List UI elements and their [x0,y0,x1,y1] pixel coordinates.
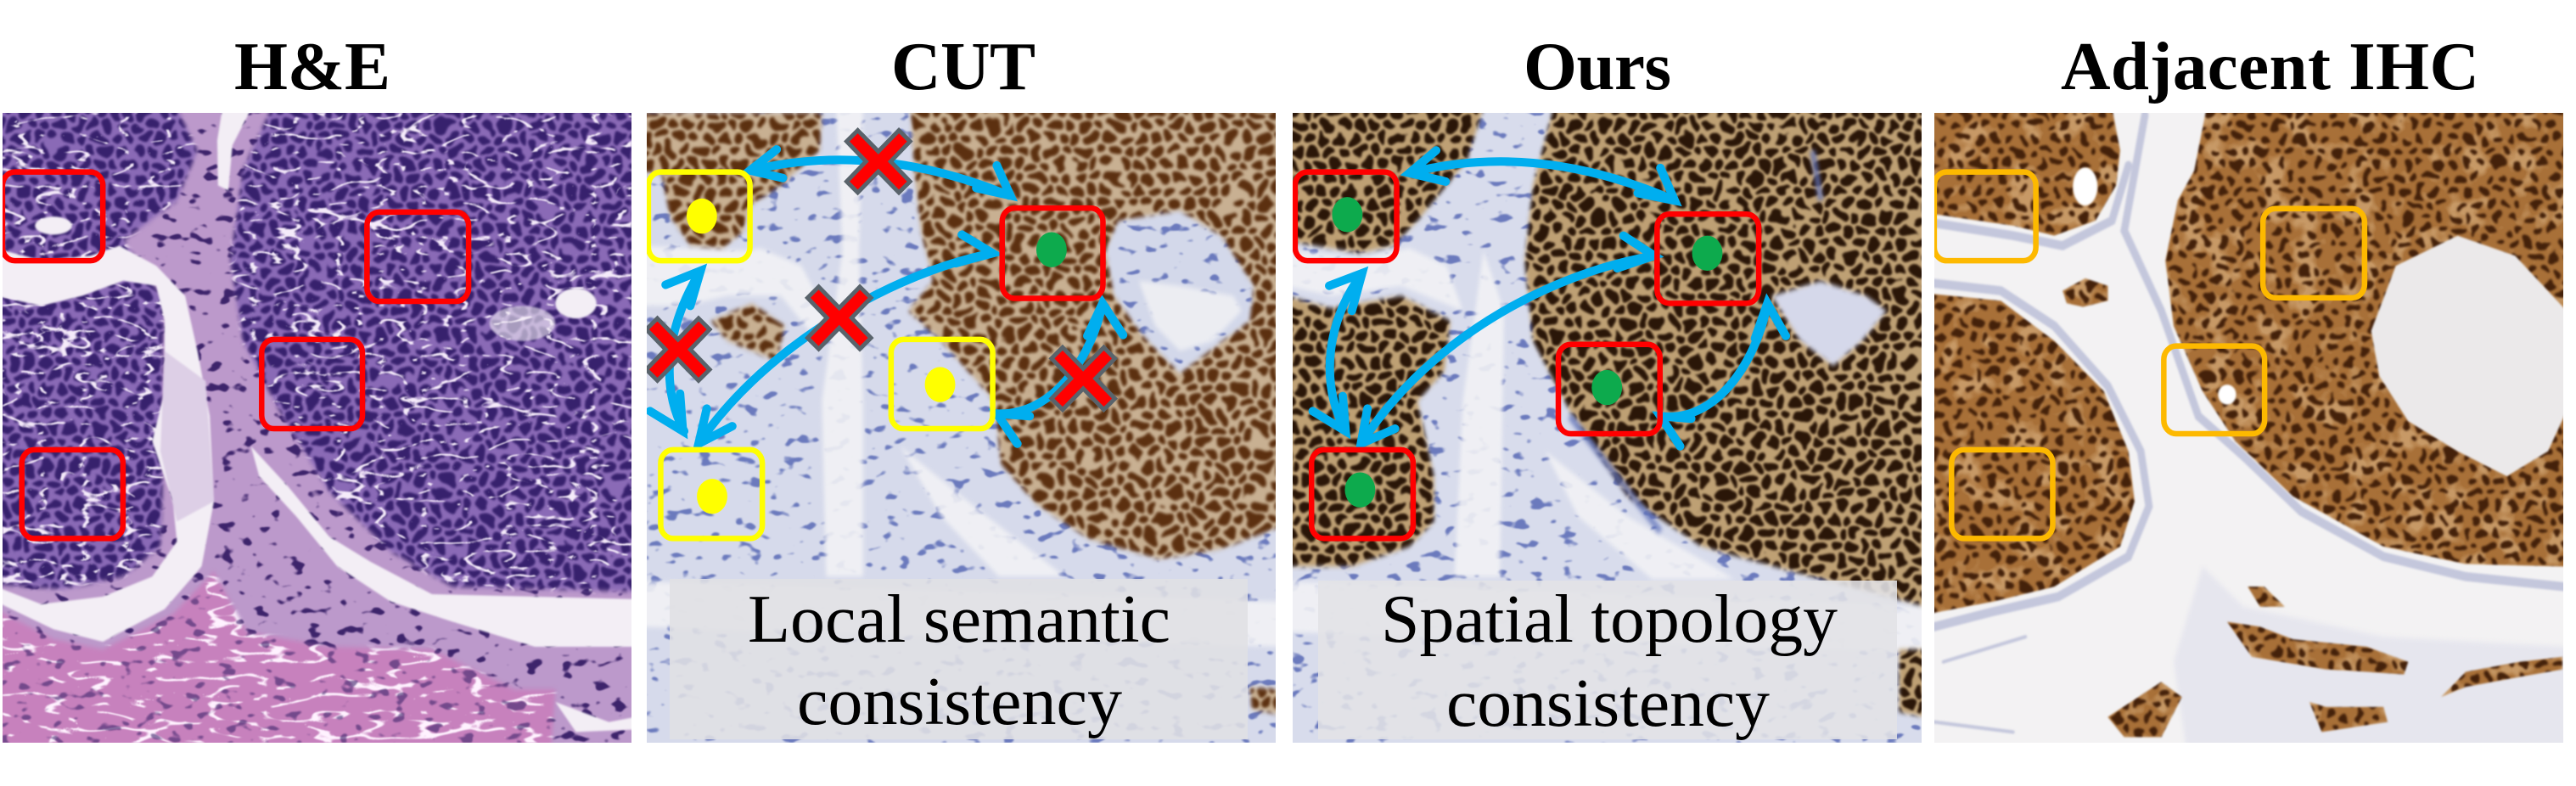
white tissue gaps [0,109,636,732]
white lumens [2073,167,2567,476]
red X marks [646,131,1115,410]
lavender lower connective tissue [2174,566,2567,747]
brown stained tumour [647,113,1276,718]
white background [1934,113,2563,743]
blue relation arrows [1313,150,1786,446]
panel: Adjacent IHC [1900,79,2576,777]
pale tissue gaps [641,108,1281,647]
pale lumen and blue vein [1570,150,1887,531]
tumour tissue background [3,113,631,596]
stroma [3,113,631,743]
panel: Ours result [1259,79,1956,777]
panel: CUT result [647,113,1276,743]
title: H&E: H&E [234,28,390,104]
marked regions and dots [648,172,1103,538]
pink collagen [3,572,557,743]
caption: local semantic consistency [670,579,1248,739]
marked regions and dots [1295,172,1759,538]
title: Adjacent IHC: Adjacent IHC [2061,28,2479,104]
brown stained tumour [1900,79,2576,777]
caption: spatial topology consistency: Spatial topology [1381,581,1838,657]
panel: H&E tissue [3,113,631,743]
caption: local semantic consistency: Local semantic [748,581,1170,657]
caption: spatial topology consistency [1318,581,1897,741]
blue relation arrows [650,149,1123,444]
title: Ours: Ours [1524,28,1671,104]
caption: local semantic consistency: consistency [797,663,1122,739]
brown stained tumour [1259,79,1956,777]
lavender connective tissue bands [1934,115,2563,732]
pale stroma background [1293,113,1922,743]
marked regions [3,172,469,538]
marked regions [1934,172,2365,538]
pale stroma background [647,113,1276,743]
caption: spatial topology consistency: consistency [1446,665,1770,741]
title: CUT: CUT [891,28,1035,104]
pale tissue gaps [1286,248,1926,652]
pale lumen [1105,207,1256,375]
